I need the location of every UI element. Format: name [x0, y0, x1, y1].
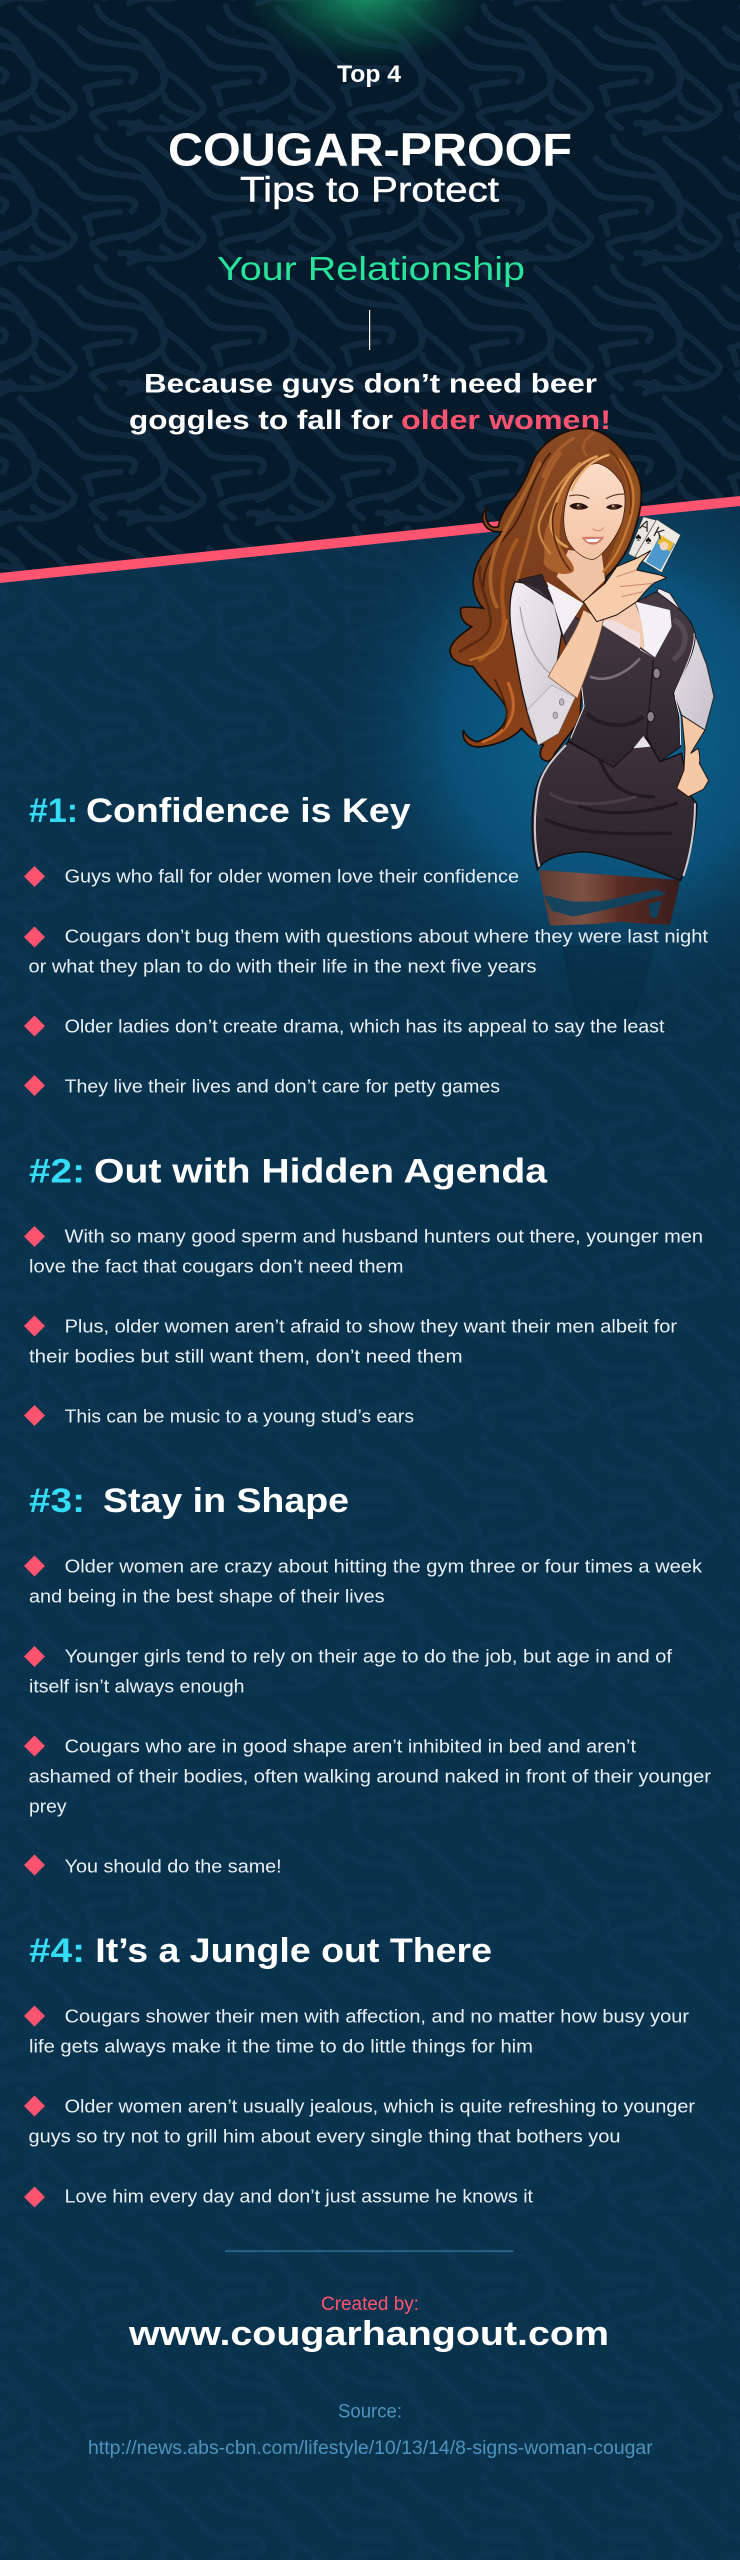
background: dark upper pattern — [0, 0, 740, 600]
created by label: Created by: — [321, 2294, 419, 2315]
eyebrow: Top 4: Top 4 — [337, 61, 402, 88]
heading 4: #4: — [29, 1932, 85, 1970]
bullet 3.1: and being in the best shape of their lives — [29, 1586, 385, 1607]
blue glow behind character — [376, 512, 740, 958]
nose and lips — [582, 527, 604, 545]
playing cards: ♠ — [635, 532, 641, 544]
heading 1: #1: — [29, 792, 78, 830]
title: COUGAR-PROOF: COUGAR-PROOF — [168, 124, 572, 176]
bullet 3.3 — [24, 1736, 711, 1817]
hand holding cards — [583, 551, 667, 622]
header block — [129, 61, 611, 435]
bullet 2.1: love the fact that cougars don’t need them — [29, 1256, 404, 1277]
bullet 4.1 — [24, 2006, 689, 2057]
subtitle: Tips to Protect: Tips to Protect — [240, 171, 499, 210]
panel: tip 1 — [24, 792, 708, 1097]
faded ghost of legs below the character — [561, 945, 656, 1050]
left sleeve — [510, 582, 575, 745]
source url: http://news.abs-cbn.com/lifestyle/10/13/14/8-signs-woman-cougar — [88, 2438, 653, 2459]
heading 4: It’s a Jungle out There — [95, 1932, 492, 1970]
panel: tip 4 — [24, 1932, 695, 2208]
left forearm — [548, 610, 603, 698]
source label: Source: — [338, 2402, 402, 2423]
bullet 2.2: their bodies but still want them, don’t need them — [29, 1346, 462, 1367]
bullet 4.2 — [24, 2096, 695, 2147]
bullet 2.1: With so many good sperm and husband hunters out there, younger men — [65, 1226, 703, 1247]
bullet 1.4: They live their lives and don’t care for petty games — [65, 1076, 500, 1097]
bullet 2.2 — [24, 1316, 677, 1367]
hair side locks — [543, 453, 607, 574]
bullet 1.2: or what they plan to do with their life in the next five years — [28, 956, 536, 977]
bullet 4.2: guys so try not to grill him about every single thing that bothers you — [28, 2126, 620, 2147]
playing cards — [628, 517, 681, 573]
bullet 4.3: Love him every day and don’t just assume he knows it — [65, 2186, 533, 2207]
bullet 4.1: Cougars shower their men with affection, and no matter how busy your — [65, 2006, 689, 2027]
panel: tip 2 — [24, 1152, 703, 1427]
neck — [557, 550, 605, 602]
bullet 2.3: This can be music to a young stud’s ears — [65, 1406, 414, 1427]
heading 2: #2: — [29, 1152, 85, 1190]
bullet 3.1 — [24, 1556, 703, 1607]
bullet 2.2: Plus, older women aren’t afraid to show they want their men albeit for — [65, 1316, 677, 1337]
bullet 4.2: Older women aren’t usually jealous, which is quite refreshing to younger — [65, 2096, 695, 2117]
heading 1: Confidence is Key — [86, 792, 411, 830]
pink diagonal stripe — [0, 496, 740, 583]
bullet 1.3: Older ladies don’t create drama, which has its appeal to say the least — [65, 1016, 665, 1037]
head — [539, 433, 639, 574]
tagline highlight: older women! — [401, 405, 611, 435]
brush stroke over legs — [543, 889, 667, 918]
bullet 4.1: life gets always make it the time to do little things for him — [29, 2036, 533, 2057]
legs in stockings — [539, 870, 680, 926]
playing cards: K — [650, 524, 667, 543]
subtitle: Your Relationship: Your Relationship — [217, 250, 525, 287]
bullet 3.3: Cougars who are in good shape aren’t inhibited in bed and aren’t — [65, 1736, 636, 1757]
bullet 3.4: You should do the same! — [65, 1856, 282, 1877]
illustration: woman in black vest holding playing cards — [450, 428, 714, 926]
bullet 1.2: Cougars don’t bug them with questions about where they were last night — [65, 926, 708, 947]
bullet 1.1: Guys who fall for older women love their confidence — [65, 866, 519, 887]
heading 3: Stay in Shape — [103, 1482, 349, 1520]
bullet 3.3: prey — [29, 1796, 67, 1817]
bullet 3.2 — [24, 1646, 673, 1697]
bullet 1.2 — [24, 926, 708, 977]
eyes and brows — [569, 494, 624, 510]
bullet 3.2: itself isn’t always enough — [29, 1676, 244, 1697]
playing cards: A — [637, 517, 652, 536]
panel: tip 3 — [24, 1482, 711, 1877]
bullet 3.3: ashamed of their bodies, often walking around naked in front of their younger — [28, 1766, 711, 1787]
green top glow — [240, 0, 490, 67]
right sleeve — [657, 588, 714, 730]
heading 3: #3: — [29, 1482, 85, 1520]
face — [564, 463, 625, 559]
tagline line 2: goggles to fall for — [129, 405, 394, 435]
skirt — [532, 738, 697, 881]
footer credits — [88, 2294, 653, 2459]
bullet 3.2: Younger girls tend to rely on their age to do the job, but age in and of — [65, 1646, 673, 1667]
tagline line 1: Because guys don’t need beer — [144, 369, 598, 399]
bullet 3.1: Older women are crazy about hitting the gym three or four times a week — [65, 1556, 703, 1577]
bullet 2.1 — [24, 1226, 703, 1277]
hair back — [450, 428, 641, 761]
vertical divider — [369, 310, 370, 350]
heading 2: Out with Hidden Agenda — [94, 1152, 548, 1190]
playing cards: ♠ — [645, 534, 651, 546]
shirt and chest — [547, 582, 672, 657]
vest — [518, 574, 695, 767]
website: www.cougarhangout.com — [128, 2315, 609, 2353]
right arm and hand on hip — [677, 715, 709, 797]
